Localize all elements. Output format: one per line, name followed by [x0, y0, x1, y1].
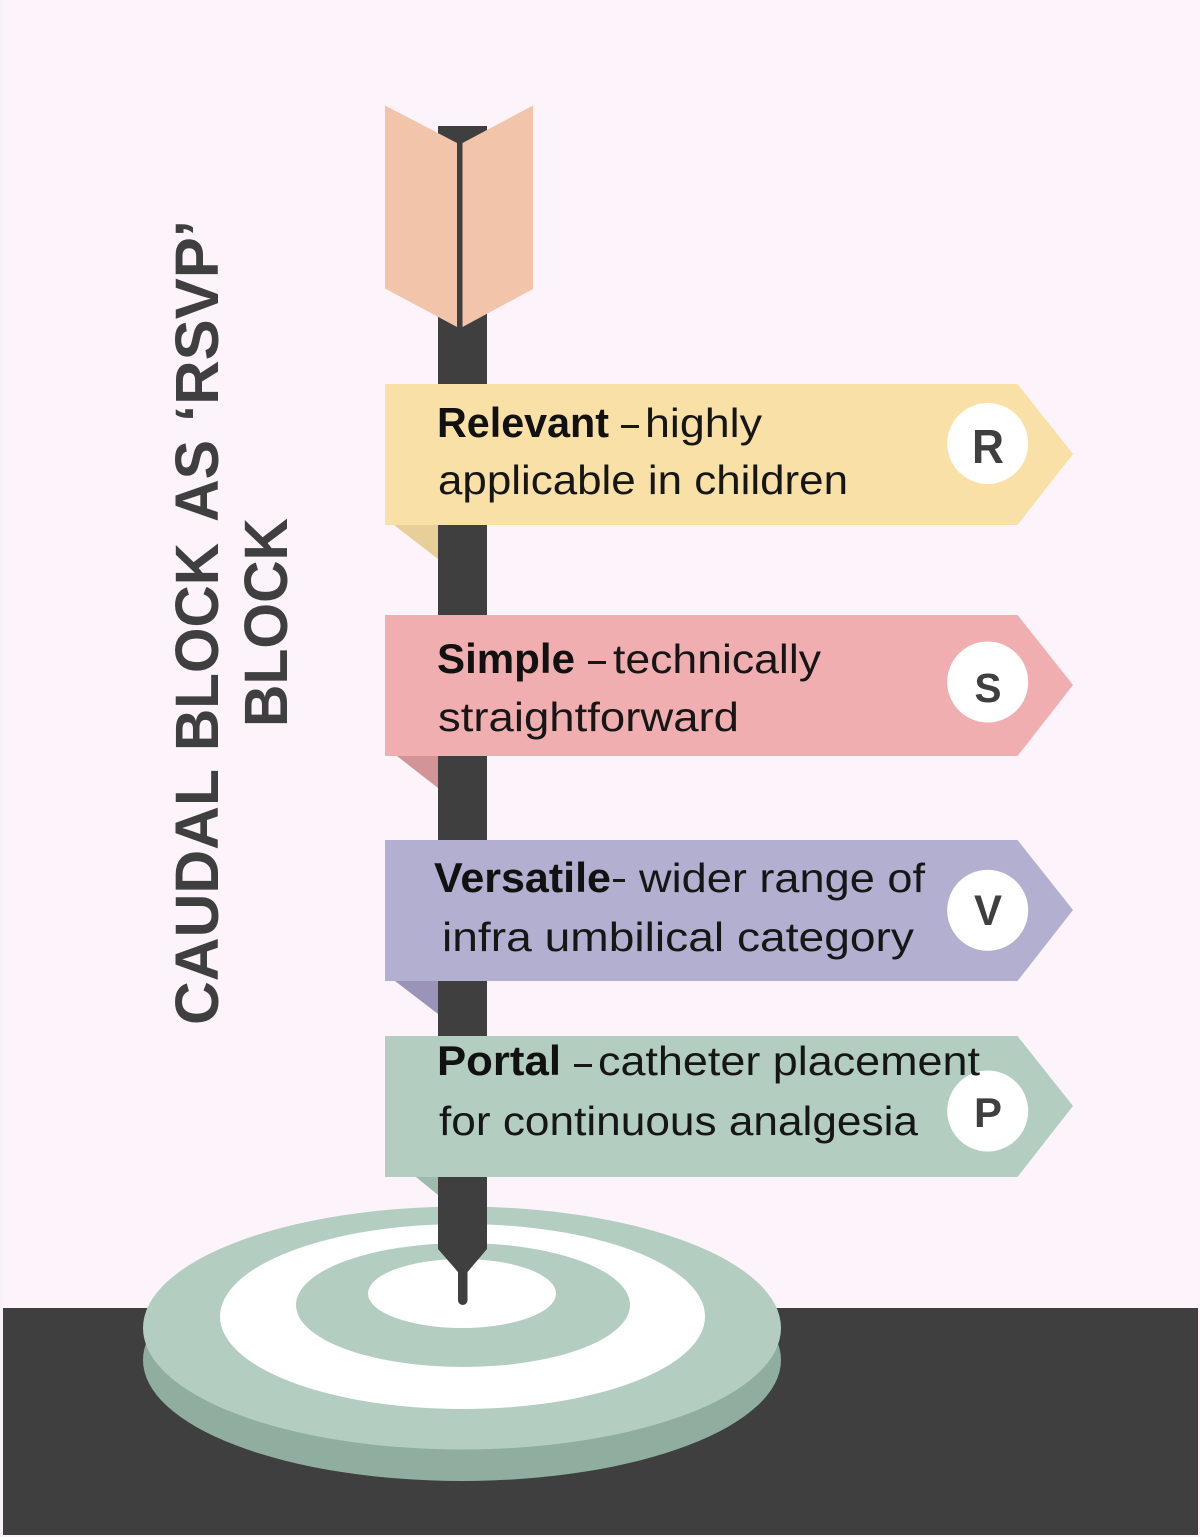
vertical title	[163, 220, 231, 1025]
banner S: Simple	[385, 615, 1073, 788]
banner P: Portal	[385, 1036, 1073, 1195]
banner P: Portal: catheter placement	[598, 1038, 981, 1084]
ground band	[3, 1308, 1198, 1535]
banner S: Simple: S	[974, 665, 1002, 711]
banner V: Versatile: V	[974, 887, 1002, 935]
banner P: Portal: for continuous analgesia	[439, 1098, 918, 1144]
vertical title: BLOCK	[163, 543, 231, 751]
banner V: Versatile: Versatile	[434, 854, 611, 901]
arrow shaft	[438, 126, 487, 1305]
target board	[143, 1206, 781, 1481]
banner R: Relevant: Relevant	[437, 399, 609, 446]
banner S: Simple: technically	[613, 636, 822, 682]
banner V: Versatile: infra umbilical category	[442, 914, 915, 960]
banner R: Relevant	[385, 384, 1073, 559]
banner V: Versatile	[385, 840, 1073, 1014]
arrow fletching	[385, 106, 533, 327]
banner P: Portal: P	[974, 1089, 1002, 1136]
banner V: Versatile: wider range of	[638, 855, 926, 901]
banner P: Portal: Portal	[437, 1037, 561, 1084]
banner R: Relevant: highly	[645, 400, 763, 446]
vertical title: AS	[163, 440, 231, 522]
banner S: Simple: straightforward	[438, 694, 739, 740]
vertical title: CAUDAL	[163, 769, 231, 1025]
vertical title line 2: BLOCK	[232, 518, 300, 727]
banner S: Simple: Simple	[437, 635, 575, 682]
banner R: Relevant: R	[972, 421, 1004, 474]
vertical title: ‘RSVP’	[163, 220, 231, 422]
banner R: Relevant: applicable in children	[438, 457, 848, 503]
